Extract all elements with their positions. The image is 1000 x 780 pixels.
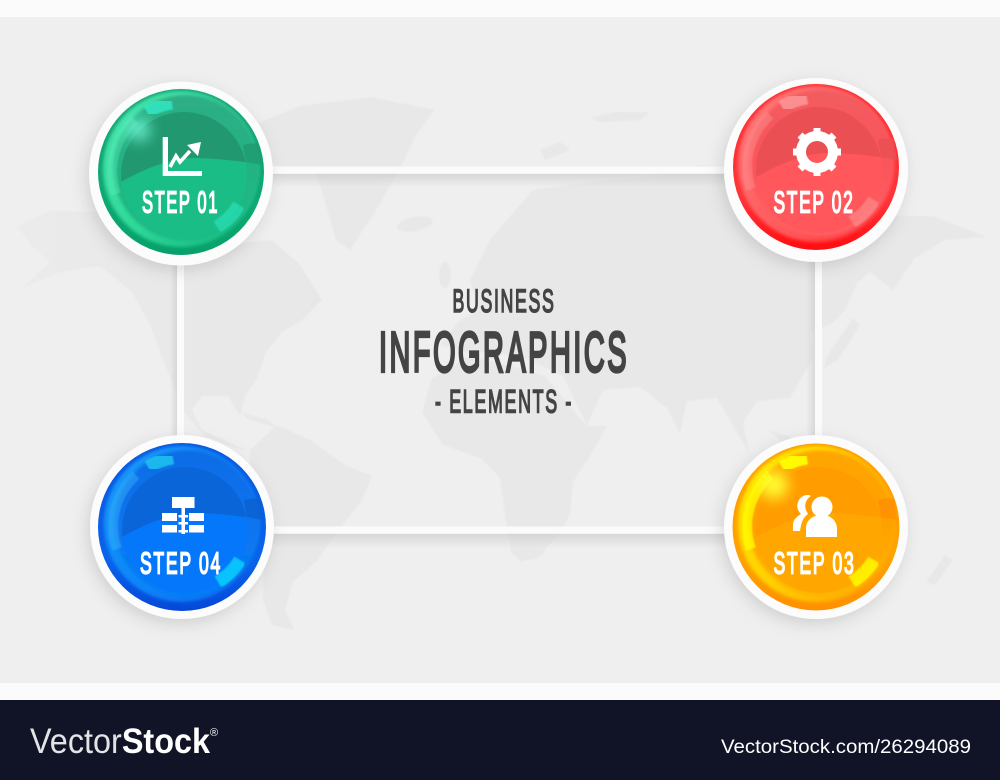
title block: [379, 283, 629, 420]
title: business: BUSINESS: [452, 283, 556, 319]
footer logo registered mark: ®: [210, 727, 218, 739]
map: Eurasia: [440, 165, 987, 455]
map: Greenland: [250, 97, 435, 250]
map: South America: [250, 425, 372, 630]
step 04 badge: [90, 435, 274, 619]
icon: organisation chart: [162, 497, 204, 534]
title: infographics: INFOGRAPHICS: [379, 320, 629, 384]
icon: people: [793, 495, 837, 537]
footer logo: VectorStock: [30, 722, 210, 761]
step 02 badge: [724, 78, 908, 262]
map: islands: [240, 112, 953, 585]
icon: growth chart: [163, 137, 202, 176]
map: North America: [17, 211, 322, 452]
map: Australia: [765, 470, 900, 590]
step 01 badge: [89, 82, 273, 266]
world map: [17, 97, 987, 630]
footer image id: VectorStock.com/26294089: [721, 737, 971, 758]
footer bar: [0, 700, 1000, 780]
title: elements: - ELEMENTS -: [435, 384, 573, 420]
step 03 badge: [724, 435, 908, 619]
label: step 03: STEP 03: [774, 546, 856, 580]
map: Africa: [422, 356, 607, 562]
label: step 02: STEP 02: [774, 184, 854, 220]
label: step 01: STEP 01: [142, 184, 219, 220]
frame connecting the steps: [170, 166, 822, 548]
label: step 04: STEP 04: [140, 546, 222, 580]
icon: gear: [793, 128, 841, 176]
